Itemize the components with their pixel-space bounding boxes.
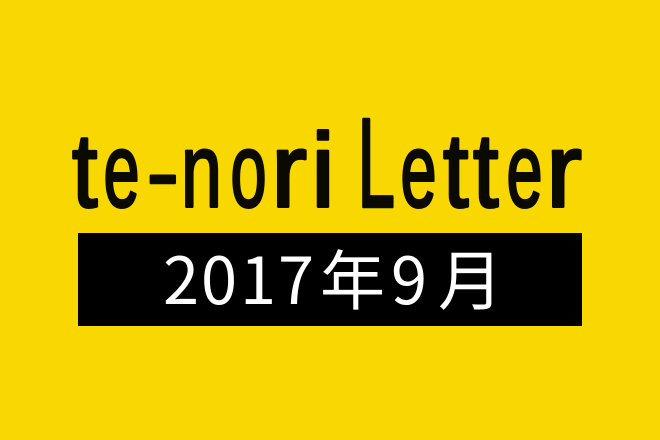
date banner bbox=[78, 229, 582, 326]
title: i bbox=[311, 112, 335, 229]
title: e bbox=[400, 113, 437, 229]
title: t bbox=[72, 112, 98, 229]
title: n bbox=[181, 113, 222, 230]
date text: 2017年9月 bbox=[163, 229, 503, 323]
title: e bbox=[506, 113, 543, 229]
title: L bbox=[358, 93, 395, 234]
title: r bbox=[271, 112, 307, 229]
title: - bbox=[147, 121, 179, 224]
title: r bbox=[546, 112, 582, 229]
title bbox=[72, 93, 582, 234]
title: t bbox=[473, 112, 499, 229]
title: o bbox=[230, 113, 267, 229]
title: t bbox=[443, 112, 469, 229]
title: e bbox=[104, 113, 140, 229]
